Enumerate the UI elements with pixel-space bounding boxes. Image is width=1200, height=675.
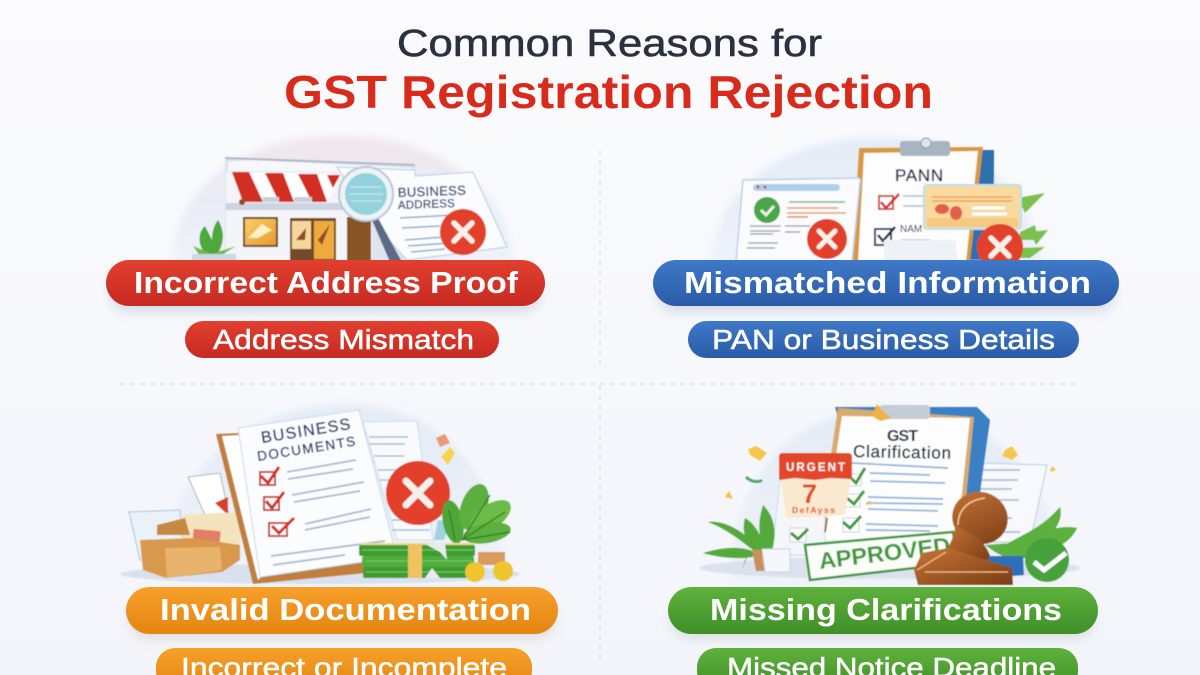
title <box>284 23 933 118</box>
panel: mismatched information <box>653 138 1119 358</box>
sub label pill <box>185 321 499 358</box>
illustration: clarification clipboard, urgent calendar and approval stamp: DefAyss <box>792 505 835 515</box>
illustration: business documents, box and money <box>120 405 520 585</box>
sub label pill <box>697 648 1078 675</box>
panel: incorrect address proof <box>106 136 545 358</box>
heading pill <box>653 260 1119 312</box>
sub label pill: Address Mismatch <box>213 324 474 355</box>
illustration: PAN clipboard and ID card <box>712 138 1048 270</box>
illustration: business documents, box and money: BUSINESS <box>260 416 352 447</box>
illustration: clarification clipboard, urgent calendar and approval stamp: Clarification <box>853 442 951 463</box>
panel: invalid documentation <box>120 405 558 675</box>
illustration: clarification clipboard, urgent calendar and approval stamp: GST <box>887 428 918 445</box>
illustration: clarification clipboard, urgent calendar and approval stamp: APPROVED <box>817 532 952 574</box>
sub label pill: PAN or Business Details <box>712 324 1055 355</box>
panel: missing clarifications <box>668 404 1098 675</box>
illustration: shop and business address document <box>172 136 514 266</box>
heading pill: Invalid Documentation <box>160 592 531 627</box>
illustration: shop and business address document: ADDRESS <box>398 198 455 212</box>
title: GST Registration Rejection <box>284 66 933 118</box>
title: Common Reasons for <box>397 23 822 65</box>
sub label pill <box>156 648 532 675</box>
illustration: business documents, box and money: DOCUMENTS <box>256 434 356 464</box>
heading pill <box>126 587 558 639</box>
heading pill: Incorrect Address Proof <box>134 265 519 300</box>
illustration: PAN clipboard and ID card: PANN <box>895 166 943 185</box>
illustration: PAN clipboard and ID card: NAM <box>900 224 922 235</box>
illustration: clarification clipboard, urgent calendar and approval stamp: URGENT <box>786 462 845 474</box>
sub label pill <box>688 321 1079 358</box>
illustration: clarification clipboard, urgent calendar and approval stamp: 7 <box>802 479 817 509</box>
heading pill: Mismatched Information <box>684 265 1091 300</box>
illustration: clarification clipboard, urgent calendar and approval stamp <box>700 404 1080 585</box>
illustration: shop and business address document: BUSINESS <box>398 183 466 200</box>
heading pill: Missing Clarifications <box>710 592 1062 627</box>
heading pill <box>106 260 545 312</box>
heading pill <box>668 587 1098 639</box>
